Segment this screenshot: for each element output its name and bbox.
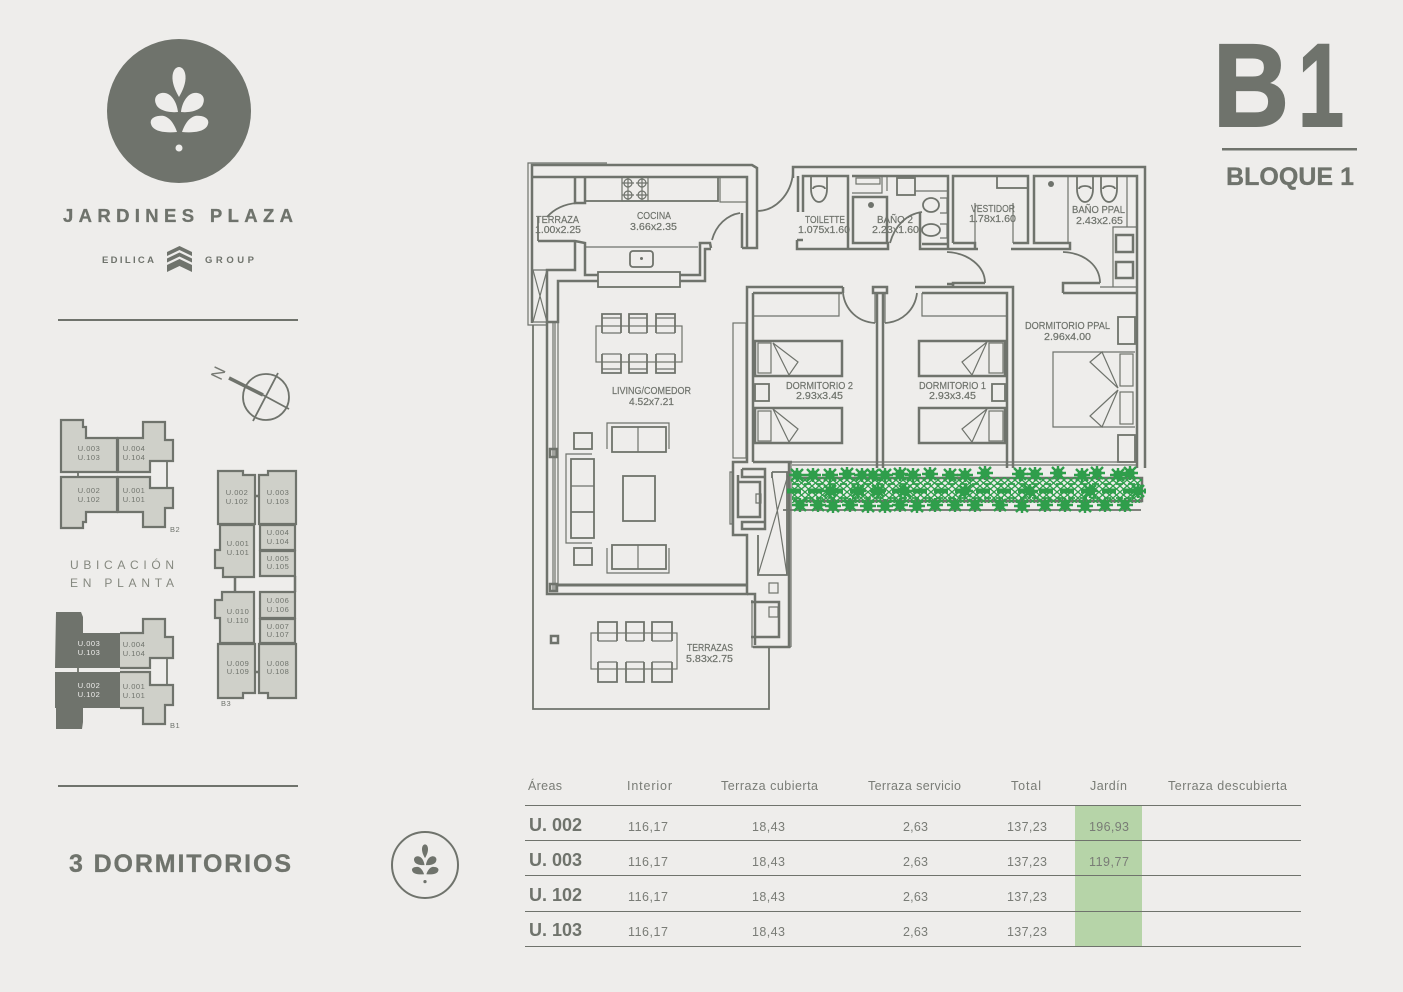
key plan: block B3: U.104: [267, 537, 289, 546]
key plan: block B2: U.004: [123, 444, 145, 453]
room labels: 1.00x2.25: [535, 225, 581, 236]
row U. 102: 2,63: [903, 890, 928, 904]
row U. 102: [529, 885, 1047, 905]
master bedroom: [792, 317, 1137, 465]
table header: Áreas: [528, 778, 562, 793]
table rules: [525, 806, 1301, 946]
row U. 103: [529, 920, 1047, 940]
room labels: DORMITORIO 1: [919, 381, 986, 392]
key plan: block B1 highlighted: U.002: [78, 681, 100, 690]
service core: [730, 293, 792, 647]
key plan: block B1 highlighted: U.101: [123, 691, 145, 700]
location caption: UBICACIÓN: [70, 557, 174, 572]
key plan: block B3: U.006: [267, 596, 289, 605]
room labels: VESTIDOR: [971, 204, 1015, 215]
row U. 103: 116,17: [628, 925, 668, 939]
brand name: JARDINES PLAZA: [63, 205, 293, 226]
living room walls: [533, 287, 843, 709]
garden column highlight: [1075, 805, 1142, 946]
key plan: block B3: U.007: [267, 622, 289, 631]
key plan: block B3: U.003: [267, 488, 289, 497]
key plan: block B1 highlighted: U.104: [123, 649, 145, 658]
key plan: block B1 highlighted: U.004: [123, 640, 145, 649]
row U. 002: 116,17: [628, 820, 668, 834]
key plan: block B2: U.102: [78, 495, 100, 504]
row U. 003: 119,77: [1089, 855, 1129, 869]
row U. 103: 137,23: [1007, 925, 1047, 939]
kitchen and terrace walls: [528, 163, 793, 325]
key plan: block B1 highlighted: [55, 612, 180, 730]
key plan: block B3: U.106: [267, 605, 289, 614]
key plan: block B1 highlighted: U.103: [78, 648, 100, 657]
row U. 103: 18,43: [752, 925, 785, 939]
row U. 003: 116,17: [628, 855, 668, 869]
key plan: block B2: [61, 420, 180, 534]
room labels: COCINA: [637, 211, 671, 222]
small emblem: [392, 832, 458, 898]
room labels: 2.96x4.00: [1044, 332, 1091, 343]
terrace table: [591, 622, 677, 682]
key plan: block B3: B3: [221, 699, 231, 708]
key plan: block B2: U.104: [123, 453, 145, 462]
row U. 003: 137,23: [1007, 855, 1047, 869]
row U. 003: 2,63: [903, 855, 928, 869]
block title B1: [1213, 20, 1344, 152]
areas table: [525, 778, 1301, 946]
table header: Total: [1011, 779, 1041, 793]
block title B1: B: [1213, 20, 1289, 152]
key plan: block B3: [215, 471, 296, 708]
key plan: block B3: U.004: [267, 528, 289, 537]
bedroom 1: [885, 283, 1013, 468]
room labels: 1.075x1.60: [798, 225, 850, 236]
table header: Interior: [627, 779, 672, 793]
row U. 102: 18,43: [752, 890, 785, 904]
key plan: block B3: U.009: [227, 659, 249, 668]
key plan: block B1 highlighted: U.003: [78, 639, 100, 648]
row U. 002: U. 002: [529, 815, 582, 835]
key plan: block B3: U.010: [227, 607, 249, 616]
row U. 002: 2,63: [903, 820, 928, 834]
room labels: BAÑO 2: [877, 213, 913, 226]
table header: Terraza descubierta: [1168, 779, 1287, 793]
row U. 102: 116,17: [628, 890, 668, 904]
row U. 003: [529, 850, 1129, 870]
location caption: [70, 557, 174, 590]
room labels: TERRAZAS: [687, 643, 733, 654]
key plan: block B3: U.101: [227, 548, 249, 557]
floor plan: [528, 163, 1146, 709]
room labels: BAÑO PPAL: [1072, 203, 1125, 216]
key plan: block B3: U.105: [267, 562, 289, 571]
developer mark: Edilica Group: [102, 246, 255, 272]
row U. 002: 137,23: [1007, 820, 1047, 834]
room labels: 5.83x2.75: [686, 654, 733, 665]
key plan: block B3: U.103: [267, 497, 289, 506]
key plan: block B2: B2: [170, 525, 180, 534]
row U. 103: 2,63: [903, 925, 928, 939]
row U. 002: 18,43: [752, 820, 785, 834]
key plan: block B2: U.002: [78, 486, 100, 495]
center partition: [873, 287, 887, 468]
row U. 002: 196,93: [1089, 820, 1129, 834]
table header: [528, 778, 1287, 793]
bedroom 2: [753, 287, 875, 443]
key plan: block B3: U.002: [226, 488, 248, 497]
room labels: 2.93x3.45: [929, 391, 976, 402]
block title B1: 1: [1298, 20, 1344, 152]
row U. 103: U. 103: [529, 920, 582, 940]
room labels: TOILETTE: [805, 215, 845, 226]
logo: Jardines Plaza emblem: [107, 39, 251, 183]
key plan: block B2: U.103: [78, 453, 100, 462]
row U. 102: U. 102: [529, 885, 582, 905]
developer mark: Edilica Group: EDILICA: [102, 255, 154, 266]
row U. 003: U. 003: [529, 850, 582, 870]
north compass: N: [207, 364, 230, 383]
sofas and coffee table: [566, 423, 669, 573]
room labels: 1.78x1.60: [969, 214, 1016, 225]
key plan: block B1 highlighted: U.102: [78, 690, 100, 699]
room labels: LIVING/COMEDOR: [612, 386, 691, 397]
divider bottom: [58, 785, 298, 787]
room labels: 3.66x2.35: [630, 222, 677, 233]
key plan: block B3: U.102: [226, 497, 248, 506]
room labels: DORMITORIO 2: [786, 381, 853, 392]
row U. 102: 137,23: [1007, 890, 1047, 904]
block subtitle: BLOQUE 1: [1226, 163, 1354, 191]
room labels: DORMITORIO PPAL: [1025, 321, 1110, 332]
room labels: 2.23x1.60: [872, 225, 919, 236]
location caption: EN PLANTA: [70, 576, 174, 590]
key plan: block B2: U.003: [78, 444, 100, 453]
key plan: block B3: U.008: [267, 659, 289, 668]
north compass: [207, 364, 289, 421]
garden strip: [783, 466, 1146, 513]
key plan: block B3: U.109: [227, 667, 249, 676]
room labels: TERRAZA: [536, 215, 579, 226]
developer mark: Edilica Group: GROUP: [205, 255, 255, 266]
key plan: block B3: U.005: [267, 554, 289, 563]
key plan: block B1 highlighted: U.001: [123, 682, 145, 691]
key plan: block B3: U.107: [267, 630, 289, 639]
room labels: 2.93x3.45: [796, 391, 843, 402]
key plan: block B3: U.108: [267, 667, 289, 676]
key plan: block B1 highlighted: B1: [170, 721, 180, 730]
dining set: [596, 314, 682, 373]
table header: Terraza cubierta: [721, 779, 818, 793]
key plan: block B2: U.101: [123, 495, 145, 504]
row U. 002: [529, 815, 1129, 835]
divider top: [58, 319, 298, 321]
key plan: block B3: U.001: [227, 539, 249, 548]
bathrooms and dressing: [793, 167, 1145, 468]
table header: Jardín: [1090, 779, 1127, 793]
key plan: block B2: U.001: [123, 486, 145, 495]
bedrooms heading: 3 DORMITORIOS: [69, 850, 291, 878]
row U. 003: 18,43: [752, 855, 785, 869]
room labels: 4.52x7.21: [629, 397, 674, 408]
key plan: block B3: U.110: [227, 616, 249, 625]
room labels: [535, 203, 1125, 665]
table header: Terraza servicio: [868, 779, 961, 793]
title rule: [1222, 148, 1357, 150]
room labels: 2.43x2.65: [1076, 216, 1123, 227]
